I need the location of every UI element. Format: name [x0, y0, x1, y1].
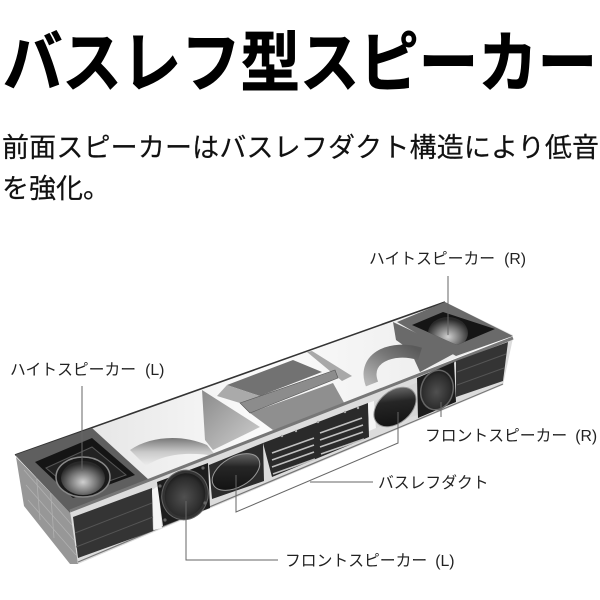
front edge highlight [70, 338, 513, 511]
left front grille panel [73, 488, 153, 558]
glass top body [15, 302, 513, 513]
description text [2, 133, 599, 204]
centre vent grille [263, 403, 369, 477]
label: height speaker R: ハイトスピーカー (R) [369, 251, 526, 268]
right bass reflex port [366, 379, 424, 435]
centre unit [217, 360, 347, 430]
label: front speaker R: フロントスピーカー (R) [425, 428, 597, 445]
right wall beside height speaker [393, 322, 457, 372]
left bass reflex tube [130, 438, 216, 466]
lower edge line [78, 384, 503, 562]
white gap [152, 486, 162, 530]
back top edge [15, 302, 445, 455]
right bass reflex tube [370, 351, 420, 384]
soundbar cutaway illustration [15, 302, 513, 564]
left end face with grid [16, 457, 78, 564]
control panel [240, 370, 338, 413]
label: height speaker L: ハイトスピーカー (L) [10, 362, 164, 379]
front speaker left [155, 463, 215, 526]
right front grille panel [456, 342, 508, 397]
description text: 前面スピーカーはバスレフダクト構造により低音 [2, 133, 599, 163]
leader lines [82, 276, 448, 560]
left height speaker [15, 428, 149, 513]
label: bass reflex duct: バスレフダクト [378, 474, 489, 492]
left bass reflex port [206, 443, 266, 499]
description text: を強化。 [2, 174, 110, 204]
right inner wall [307, 351, 352, 381]
label: front speaker L: フロントスピーカー (L) [285, 553, 454, 570]
front speaker right [416, 362, 458, 418]
right height speaker [397, 302, 513, 356]
left inner wall [202, 390, 260, 450]
front frame strip [70, 338, 513, 564]
